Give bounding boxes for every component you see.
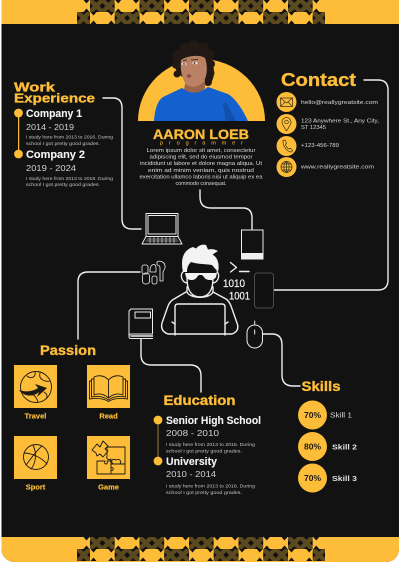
bottom decorative band bbox=[0, 537, 400, 563]
entry: senior high school: school I got pretty good grades. bbox=[166, 448, 242, 454]
panel: work experience bbox=[14, 80, 113, 187]
binary code: 1001 bbox=[229, 290, 250, 302]
entry: senior high school: I study here from 2013 to 2016. During bbox=[166, 442, 255, 447]
binary code bbox=[223, 278, 250, 302]
contact details bbox=[300, 100, 379, 170]
icon: programmer figure bbox=[162, 245, 238, 335]
entry: company 1: I study here from 2013 to 2016. During bbox=[26, 134, 113, 140]
skill 1: Skill 1 bbox=[330, 410, 352, 420]
item: game: Game bbox=[98, 482, 119, 492]
face bbox=[181, 56, 207, 87]
skill 1: 70% bbox=[304, 410, 321, 420]
laptop bbox=[175, 304, 225, 335]
connector line: education to book bbox=[141, 339, 201, 392]
skill 3: 70% bbox=[304, 473, 321, 483]
item: read: Read bbox=[99, 412, 118, 420]
entry: company 2: 2019 - 2024 bbox=[26, 163, 76, 173]
icon: laptop bbox=[142, 214, 182, 244]
icon: tablet bbox=[242, 230, 263, 259]
bio text: commodo consequat. bbox=[176, 181, 227, 187]
entry: company 2 bbox=[26, 149, 113, 187]
profile photo bbox=[138, 40, 265, 121]
entry: company 2: I study here from 2013 to 2016. During bbox=[26, 176, 113, 181]
entry: company 1: Company 1 bbox=[26, 108, 82, 120]
item: sport bbox=[14, 436, 57, 492]
icon: location pin bbox=[276, 114, 296, 134]
icon: phone bbox=[276, 136, 296, 156]
contact details: www.reallygreatsite.com bbox=[300, 164, 374, 170]
skill 3 bbox=[298, 464, 357, 492]
item: read bbox=[87, 365, 130, 420]
heading: education: Education bbox=[164, 393, 236, 408]
entry: senior high school bbox=[166, 415, 261, 454]
panel: education bbox=[154, 393, 261, 495]
bio text bbox=[140, 148, 263, 187]
entry: university: University bbox=[166, 456, 218, 468]
skill 3: Skill 3 bbox=[332, 474, 357, 483]
yellow semicircle bbox=[138, 59, 265, 121]
connector line: skills to mouse bbox=[263, 334, 300, 386]
bio text: exercitation ullamco laboris nisi ut aliquip ex ea bbox=[140, 174, 263, 180]
skill 2 bbox=[298, 432, 357, 461]
connector line: passion to headset bbox=[78, 272, 140, 339]
heading: work experience: Work bbox=[14, 80, 55, 94]
entry: university: 2010 - 2014 bbox=[166, 469, 216, 479]
entry: company 2: school I got pretty good grades. bbox=[26, 182, 100, 187]
hair bbox=[182, 245, 219, 272]
contact details: hello@reallygreatsite.com bbox=[301, 100, 378, 106]
contact details: ST 12345 bbox=[301, 125, 327, 131]
contact details: 123 Anywhere St., Any City, bbox=[301, 118, 379, 124]
item: sport: Sport bbox=[26, 482, 46, 492]
heading: work experience: Experience bbox=[14, 92, 95, 106]
skill 2: 80% bbox=[304, 442, 321, 452]
connector line: profile to tablet bbox=[200, 190, 252, 229]
panel: contact bbox=[276, 69, 379, 177]
entry: university: school I got pretty good grades. bbox=[166, 490, 242, 495]
connector line: contact to phone bbox=[274, 80, 388, 290]
icon: earbuds bbox=[142, 261, 165, 284]
skill 2: Skill 2 bbox=[332, 442, 357, 452]
bio text: enim ad minim veniam, quis nostrud bbox=[148, 168, 254, 174]
entry: university bbox=[166, 456, 255, 495]
icon: smartphone bbox=[254, 273, 274, 308]
icon: mouse bbox=[247, 321, 262, 348]
neck bbox=[184, 80, 205, 93]
entry: senior high school: Senior High School bbox=[166, 415, 261, 427]
timeline bbox=[14, 109, 23, 158]
icon: globe bbox=[276, 157, 296, 177]
job title: programmer bbox=[160, 140, 243, 146]
icon: book bbox=[129, 309, 152, 338]
heading: passion: Passion bbox=[40, 343, 96, 358]
item: travel: Travel bbox=[25, 412, 46, 420]
entry: company 1: school I got pretty good grades. bbox=[26, 141, 100, 146]
contact details: +123-456-789 bbox=[301, 143, 339, 149]
binary code: 1010 bbox=[223, 278, 245, 290]
item: travel bbox=[14, 365, 57, 420]
panel: passion bbox=[14, 343, 130, 492]
skill 1 bbox=[298, 400, 352, 430]
connector line: work experience to laptop bbox=[103, 98, 141, 229]
shirt bbox=[154, 87, 248, 121]
icon: mail bbox=[276, 92, 296, 112]
entry: university: I study here from 2013 to 2016. During bbox=[166, 484, 255, 488]
torso bbox=[162, 292, 238, 334]
icon: code prompt bbox=[230, 262, 249, 272]
hair curls bbox=[172, 40, 215, 86]
eyes and mouth bbox=[182, 60, 198, 78]
timeline bbox=[154, 416, 162, 465]
entry: company 1: 2014 - 2019 bbox=[26, 122, 74, 132]
panel: skills bbox=[298, 379, 357, 492]
bio text: Lorem ipsum dolor sit amet, consectetur bbox=[146, 148, 256, 154]
bio text: adipiscing elit, sed do eiusmod tempor bbox=[150, 154, 253, 160]
item: game bbox=[87, 436, 130, 492]
sunglasses bbox=[185, 273, 217, 280]
entry: senior high school: 2008 - 2010 bbox=[166, 428, 219, 438]
name: AARON LOEB bbox=[153, 126, 249, 142]
heading: skills: Skills bbox=[302, 379, 340, 394]
entry: company 2: Company 2 bbox=[26, 149, 85, 161]
entry: company 1 bbox=[26, 108, 113, 146]
heading: contact: Contact bbox=[281, 69, 356, 90]
top decorative band bbox=[0, 0, 400, 24]
head outline bbox=[181, 272, 219, 297]
bio text: incididunt ut labore et dolore magna aliqua. Ut bbox=[140, 161, 262, 167]
